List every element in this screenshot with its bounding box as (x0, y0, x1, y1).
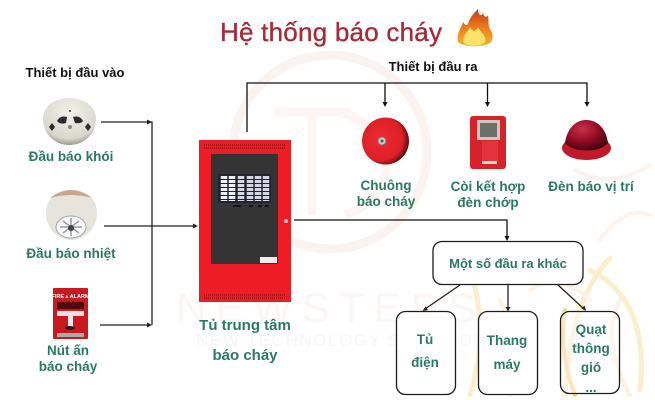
label: location lamp: Đèn báo vị trí (548, 179, 635, 194)
icon: smoke detector (43, 98, 96, 145)
title: Hệ thống báo cháy (220, 17, 442, 47)
label: horn strobe: đèn chớp (457, 195, 519, 210)
box: elevator (478, 312, 538, 394)
arrow: panel to other outputs (294, 220, 510, 241)
label: fire bell: Chuông (361, 178, 411, 193)
label: manual pull station (39, 343, 98, 374)
watermark logo (233, 55, 427, 249)
heading: outputs: Thiết bị đầu ra (389, 59, 478, 74)
panel: control cabinet (199, 140, 291, 302)
label: control cabinet (199, 317, 291, 364)
box: other outputs: Một số đầu ra khác (449, 256, 567, 271)
arrows: panel to outputs (247, 83, 590, 132)
icon: heat detector (46, 190, 97, 240)
watermark text (176, 284, 486, 350)
heading: inputs: Thiết bị đầu vào (26, 65, 125, 80)
icon: manual pull station (52, 288, 90, 339)
box: ventilation fan: gió (581, 360, 601, 375)
icon: flame (458, 9, 493, 46)
box: ventilation fan: Quạt (576, 322, 607, 337)
icon: location lamp (562, 120, 611, 160)
background flame wash (470, 165, 650, 395)
icon: manual pull station: FIRE ▵ ALARM (52, 294, 90, 300)
icon: horn strobe (470, 116, 506, 169)
label: control cabinet: Tủ trung tâm (199, 317, 291, 334)
box: ventilation fan (560, 312, 620, 395)
label: control cabinet: báo cháy (212, 347, 278, 364)
label: manual pull station: báo cháy (39, 359, 98, 374)
box: electrical cabinet: Tủ (417, 332, 433, 347)
label: smoke detector: Đầu báo khói (29, 149, 113, 164)
box: other outputs (433, 242, 583, 284)
box: ventilation fan: thông (572, 341, 610, 356)
box: elevator: Thang (487, 333, 527, 348)
icon: fire bell (362, 118, 409, 164)
label: manual pull station: Nút ấn (47, 343, 89, 358)
box: electrical cabinet (396, 312, 456, 394)
label: horn strobe: Còi kết hợp (451, 179, 525, 194)
arrows: other outputs to sub-boxes (422, 285, 586, 312)
watermark text: NEWSTEPS (176, 284, 476, 331)
watermark text: NEW TECHNOLOGY SOLUTION (196, 331, 486, 350)
label: horn strobe (451, 179, 525, 210)
label: heat detector: Đầu báo nhiệt (26, 246, 116, 261)
label: fire bell: báo cháy (357, 194, 416, 209)
label: fire bell (357, 178, 416, 209)
box: electrical cabinet: điện (411, 355, 439, 370)
box: elevator: máy (493, 357, 521, 372)
box: ventilation fan: ... (585, 380, 597, 395)
arrows: inputs to panel (100, 120, 198, 328)
